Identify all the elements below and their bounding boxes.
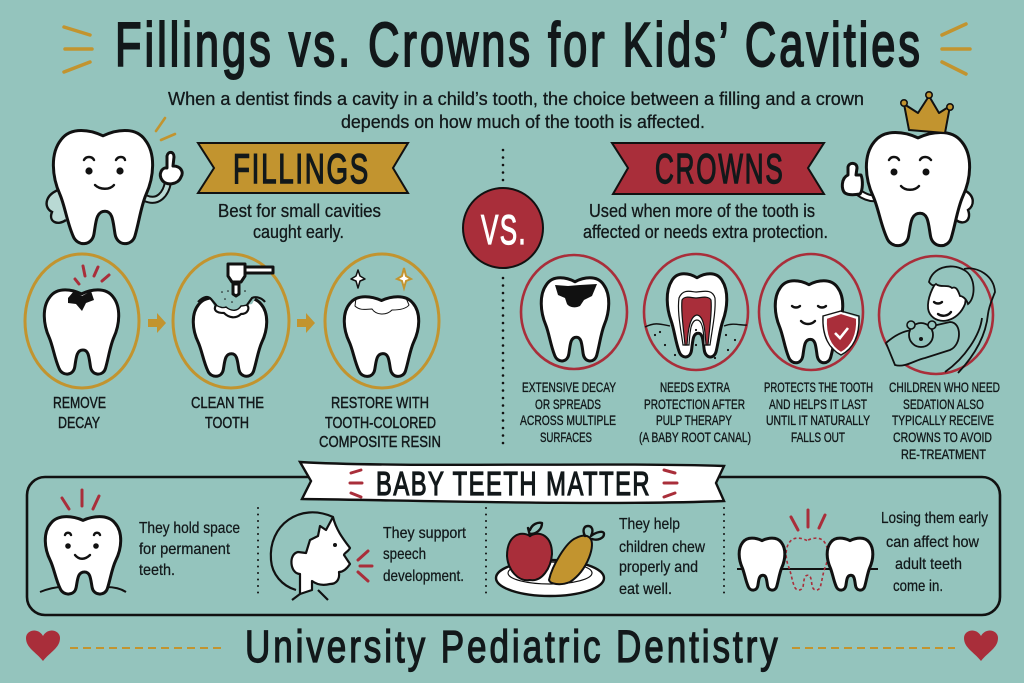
banner accents <box>350 470 677 497</box>
item: pulp therapy <box>644 254 748 370</box>
caption: extensive decay: EXTENSIVE DECAY <box>522 379 616 395</box>
item: hold space <box>40 490 240 594</box>
caption: extensive decay: ACROSS MULTIPLE <box>520 412 616 428</box>
caption: protects: AND HELPS IT LAST <box>769 396 867 412</box>
caption: pulp therapy: NEEDS EXTRA <box>660 379 730 395</box>
item: hold space: teeth. <box>139 562 175 579</box>
heading: baby teeth matter: BABY TEETH MATTER <box>376 466 650 503</box>
item: hold space: They hold space <box>139 520 240 537</box>
caption: pulp therapy: PULP THERAPY <box>656 412 732 428</box>
panel: baby teeth matter <box>27 462 1000 615</box>
step: restore <box>325 254 439 388</box>
footer dashes <box>70 647 955 649</box>
item: losing early <box>737 510 988 595</box>
step: remove decay: REMOVE <box>53 395 106 412</box>
item: losing early: come in. <box>893 578 943 595</box>
arrow <box>148 313 166 333</box>
caption: restore: COMPOSITE RESIN <box>319 434 441 451</box>
caption: extensive decay: SURFACES <box>540 429 592 445</box>
caption: protects: FALLS OUT <box>791 429 845 445</box>
mascot: pointing tooth <box>47 118 182 244</box>
item: chew: children chew <box>619 539 705 556</box>
item: chew: properly and <box>619 559 698 576</box>
item: protects the tooth <box>759 254 863 370</box>
mascot: crowned tooth <box>842 92 973 246</box>
caption: restore <box>319 395 441 451</box>
banner: fillings <box>198 143 408 193</box>
item: speech: development. <box>383 568 464 585</box>
divider with vs: VS. <box>481 207 526 254</box>
heading: fillings: FILLINGS <box>233 145 368 192</box>
item: losing early: can affect how <box>886 534 979 551</box>
caption: protects <box>764 379 873 445</box>
item: chew <box>496 516 705 598</box>
caption: pulp therapy: PROTECTION AFTER <box>644 396 745 412</box>
intro text: depends on how much of the tooth is affected. <box>341 112 705 132</box>
caption: restore: RESTORE WITH <box>331 395 429 412</box>
caption: sedation: RE-TREATMENT <box>901 446 986 462</box>
title accent: right <box>942 24 970 74</box>
title accent: left <box>64 27 92 72</box>
heading: crowns: CROWNS <box>655 146 783 193</box>
caption: sedation <box>889 379 1000 462</box>
banner: baby teeth matter <box>300 462 724 503</box>
footer <box>26 621 998 672</box>
crowns description: affected or needs extra protection. <box>583 222 828 242</box>
intro text: When a dentist finds a cavity in a child’s tooth, the choice between a filling and a crown <box>168 89 864 109</box>
arrow <box>297 313 315 333</box>
crown <box>904 96 950 133</box>
item: speech: speech <box>383 546 426 563</box>
crowns description: Used when more of the tooth is <box>589 201 815 221</box>
fillings description <box>218 201 381 242</box>
heart left <box>26 630 60 661</box>
item: hold space: for permanent <box>139 541 231 558</box>
caption: sedation: SEDATION ALSO <box>903 396 984 412</box>
caption: extensive decay: OR SPREADS <box>535 396 601 412</box>
caption: clean the tooth: TOOTH <box>205 415 249 432</box>
dividers <box>258 508 724 598</box>
step: remove decay <box>25 254 139 432</box>
caption: sedation: CROWNS TO AVOID <box>893 429 992 445</box>
step: remove decay: DECAY <box>58 415 100 432</box>
heart right <box>964 630 998 661</box>
fillings description: caught early. <box>253 222 344 242</box>
panel: crowns <box>520 92 1000 462</box>
item: sedation child <box>879 256 995 374</box>
item: chew: They help <box>619 516 680 533</box>
caption: restore: TOOTH-COLORED <box>325 415 436 432</box>
crowns description <box>583 201 828 242</box>
footer brand: University Pediatric Dentistry <box>245 621 778 672</box>
item: chew: eat well. <box>619 581 672 598</box>
caption: protects: PROTECTS THE TOOTH <box>764 379 873 395</box>
fillings description: Best for small cavities <box>218 201 381 221</box>
caption: extensive decay <box>520 379 616 445</box>
item: speech: They support <box>383 525 466 542</box>
item: losing early: adult teeth <box>895 556 962 573</box>
item: speech <box>271 512 466 600</box>
divider with vs <box>463 150 543 450</box>
caption: protects: UNTIL IT NATURALLY <box>766 412 870 428</box>
step: clean the tooth <box>173 254 289 388</box>
intro text <box>168 89 864 132</box>
panel: fillings <box>25 118 441 451</box>
caption: clean the tooth: CLEAN THE <box>191 395 264 412</box>
item: losing early: Losing them early <box>881 510 988 527</box>
caption: clean the tooth <box>191 395 264 432</box>
title: Fillings vs. Crowns for Kids’ Cavities <box>115 12 920 80</box>
caption: pulp therapy: (A BABY ROOT CANAL) <box>639 429 751 445</box>
caption: pulp therapy <box>639 379 751 445</box>
item: extensive decay <box>521 255 627 369</box>
banner: crowns <box>612 143 824 194</box>
